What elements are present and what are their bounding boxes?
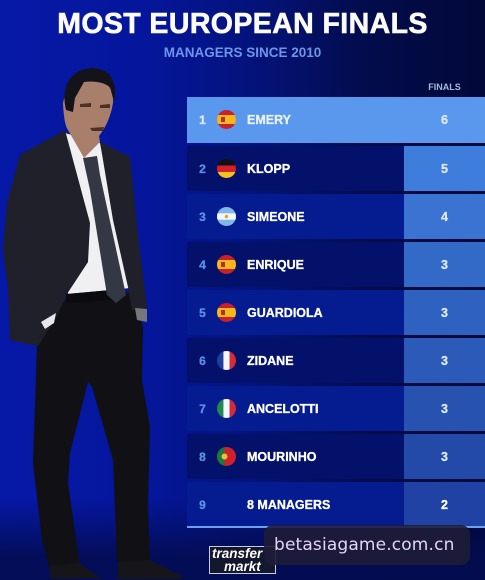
finals bar bbox=[404, 290, 485, 335]
row 3: Simeone: SIMEONE bbox=[247, 210, 305, 224]
shirt bbox=[65, 133, 130, 294]
left shoe bbox=[50, 563, 101, 579]
jacket right panel bbox=[100, 142, 147, 310]
flag: Spain bbox=[217, 303, 236, 322]
trousers bbox=[33, 292, 150, 570]
row 6: Zidane: 6 bbox=[199, 354, 206, 368]
row 8: Mourinho: MOURINHO bbox=[247, 450, 316, 464]
row 4: Enrique: 4 bbox=[199, 258, 206, 272]
flag: Spain bbox=[217, 110, 236, 129]
row 3: Simeone bbox=[187, 194, 485, 239]
neck and face bbox=[63, 78, 113, 158]
watermark: betasiagame.com.cn bbox=[274, 535, 454, 555]
finals bar bbox=[404, 482, 485, 526]
right shoe bbox=[118, 560, 184, 579]
row 8: Mourinho bbox=[187, 434, 485, 479]
row 4: Enrique: 3 bbox=[441, 258, 448, 272]
finals bar bbox=[404, 338, 485, 383]
row 1: Emery: EMERY bbox=[247, 113, 291, 127]
row 2: Klopp bbox=[187, 146, 485, 191]
belt bbox=[66, 290, 112, 303]
finals bar bbox=[404, 434, 485, 479]
logo: transfermarkt bbox=[209, 546, 276, 574]
flag: Germany bbox=[217, 159, 236, 178]
row 2: Klopp: 2 bbox=[199, 162, 206, 176]
finals bar bbox=[404, 242, 485, 287]
row 4: Enrique: ENRIQUE bbox=[247, 258, 304, 272]
row 1: Emery: 1 bbox=[199, 113, 206, 127]
row 9: 8 managers bbox=[187, 482, 485, 526]
finals bar bbox=[404, 386, 485, 431]
jacket left panel bbox=[3, 130, 90, 346]
row 5: Guardiola: GUARDIOLA bbox=[247, 306, 323, 320]
flag: Spain bbox=[217, 255, 236, 274]
shirt cuff bbox=[41, 313, 56, 329]
subtitle: MANAGERS SINCE 2010 bbox=[164, 45, 321, 60]
flag: Argentina bbox=[217, 207, 236, 226]
flag: Portugal bbox=[217, 447, 236, 466]
row 9: 8 managers: 9 bbox=[199, 498, 206, 512]
row 8: Mourinho: 8 bbox=[199, 450, 206, 464]
row 7: Ancelotti: ANCELOTTI bbox=[247, 402, 319, 416]
flag: Italy bbox=[217, 399, 236, 418]
row 7: Ancelotti: 7 bbox=[199, 402, 206, 416]
row 7: Ancelotti bbox=[187, 386, 485, 431]
row 3: Simeone: 4 bbox=[441, 210, 448, 224]
title: MOST EUROPEAN FINALS bbox=[57, 8, 428, 40]
row 6: Zidane: ZIDANE bbox=[247, 354, 294, 368]
row 6: Zidane: 3 bbox=[441, 354, 448, 368]
row 5: Guardiola: 3 bbox=[441, 306, 448, 320]
row 2: Klopp: 5 bbox=[441, 162, 448, 176]
flag: France bbox=[217, 351, 236, 370]
row 2: Klopp: KLOPP bbox=[247, 162, 290, 176]
row 5: Guardiola bbox=[187, 290, 485, 335]
row 7: Ancelotti: 3 bbox=[441, 402, 448, 416]
logo: transfermarkt: transfer bbox=[212, 546, 262, 561]
table bottom line bbox=[187, 526, 485, 528]
column header: finals: FINALS bbox=[428, 82, 461, 92]
tie bbox=[83, 156, 126, 303]
hair bbox=[64, 68, 115, 112]
row 8: Mourinho: 3 bbox=[441, 450, 448, 464]
row 3: Simeone: 3 bbox=[199, 210, 206, 224]
row 1: Emery bbox=[187, 97, 485, 143]
row 4: Enrique bbox=[187, 242, 485, 287]
watermark bbox=[264, 525, 470, 565]
row 5: Guardiola: 5 bbox=[199, 306, 206, 320]
logo: transfermarkt: markt bbox=[224, 559, 261, 574]
manager figure bbox=[3, 68, 184, 579]
finals bar bbox=[404, 194, 485, 239]
row 1: Emery: 6 bbox=[441, 113, 448, 127]
row 6: Zidane bbox=[187, 338, 485, 383]
finals bar bbox=[404, 146, 485, 191]
row 9: 8 managers: 2 bbox=[441, 498, 448, 512]
facial shadow: eyes and mouth bbox=[80, 103, 110, 131]
row 9: 8 managers: 8 MANAGERS bbox=[247, 498, 330, 512]
watch bbox=[135, 308, 147, 322]
